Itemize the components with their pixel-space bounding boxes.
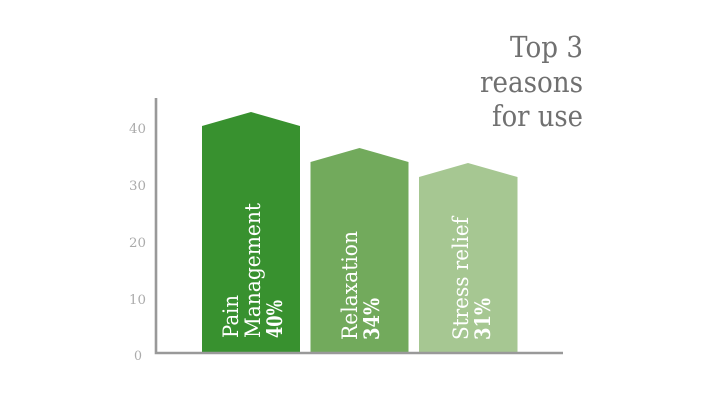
bar: relaxation 34%	[310, 148, 408, 353]
bar: stress relief 31%	[419, 163, 518, 353]
y axis labels: 40	[129, 122, 146, 137]
title: Top 3	[510, 30, 583, 64]
y axis labels: 10	[129, 293, 146, 308]
y axis labels	[129, 122, 146, 364]
title: for use	[492, 99, 583, 133]
y axis labels: 0	[134, 349, 142, 364]
chart axes	[156, 98, 563, 353]
bar: pain management 40%	[202, 112, 300, 353]
y axis labels: 30	[129, 179, 146, 194]
title: reasons	[480, 65, 583, 99]
bar: stress relief 31%: Stress relief	[449, 215, 473, 340]
bar: pain management 40%: Management	[241, 202, 265, 338]
bar: stress relief 31%: 31%	[470, 298, 495, 340]
bar: relaxation 34%: Relaxation	[338, 231, 362, 340]
title	[480, 30, 583, 133]
bar: relaxation 34%: 34%	[359, 298, 384, 340]
y axis labels: 20	[129, 236, 146, 251]
bar: pain management 40%: Pain	[219, 295, 243, 338]
bar: pain management 40%: 40%	[262, 300, 287, 338]
